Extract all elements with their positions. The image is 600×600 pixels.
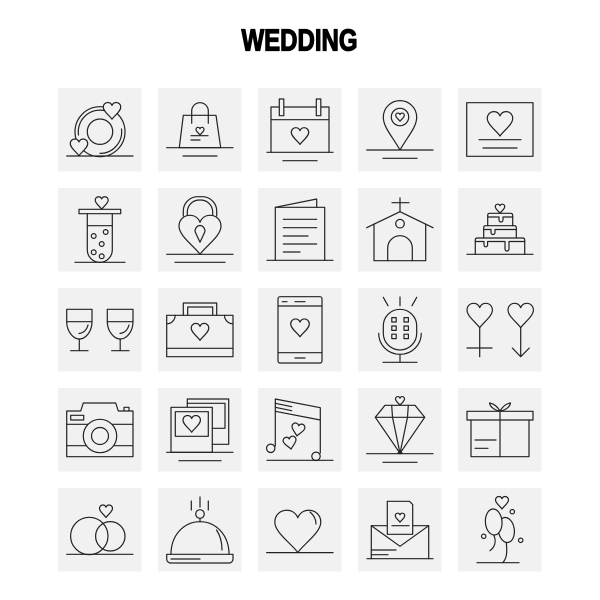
icon: photo frames <box>167 399 233 461</box>
icon: diamond <box>367 397 433 462</box>
panel: food cloche <box>158 488 242 572</box>
panel: calendar <box>258 88 342 172</box>
icon: phone <box>278 297 322 363</box>
panel: love letter <box>358 488 442 572</box>
panel: location pin <box>358 88 442 172</box>
panel: test tube <box>58 188 142 272</box>
icon: cloche <box>167 497 233 563</box>
panel: camera <box>58 388 142 472</box>
icon: two glasses <box>67 309 133 351</box>
panel: wedding cake <box>458 188 542 272</box>
icon: mic <box>379 297 421 362</box>
panel: shopping bag <box>158 88 242 172</box>
icon: envelope <box>367 501 433 559</box>
panel: photos <box>158 388 242 472</box>
panel: wedding rings <box>58 488 142 572</box>
panel: card with heart <box>458 88 542 172</box>
panel: wine glasses <box>58 288 142 372</box>
panel: smartphone <box>258 288 342 372</box>
icon: cake <box>467 204 533 254</box>
icon: camera <box>67 403 133 457</box>
panel: suitcase <box>158 288 242 372</box>
icon: female and male hearts <box>467 303 533 357</box>
icon: heart <box>267 510 333 553</box>
panel: rings with hearts <box>58 88 142 172</box>
title: WEDDING <box>242 23 358 57</box>
panel: music note <box>258 388 342 472</box>
panel: invitation card <box>258 188 342 272</box>
panel: big heart <box>258 488 342 572</box>
icon: ring <box>67 102 133 157</box>
panel: church <box>358 188 442 272</box>
icon: folded card <box>267 199 333 260</box>
panel: heart padlock <box>158 188 242 272</box>
icon: interlocked rings <box>67 505 133 555</box>
icon: calendar <box>267 99 333 161</box>
icon: music note <box>266 399 333 460</box>
panel: gender hearts <box>458 288 542 372</box>
icon: padlock <box>167 197 233 262</box>
icon: gift <box>467 403 533 457</box>
icon: bag <box>167 103 233 156</box>
icon: framed heart <box>467 103 533 156</box>
panel: balloons <box>458 488 542 572</box>
icon: pin <box>367 101 433 158</box>
panel: microphone <box>358 288 442 372</box>
icon: suitcase <box>167 303 233 357</box>
icon: test tube <box>75 197 125 262</box>
panel: diamond <box>358 388 442 472</box>
panel: gift box <box>458 388 542 472</box>
icon: balloons <box>477 497 523 563</box>
icon: church <box>367 198 433 261</box>
